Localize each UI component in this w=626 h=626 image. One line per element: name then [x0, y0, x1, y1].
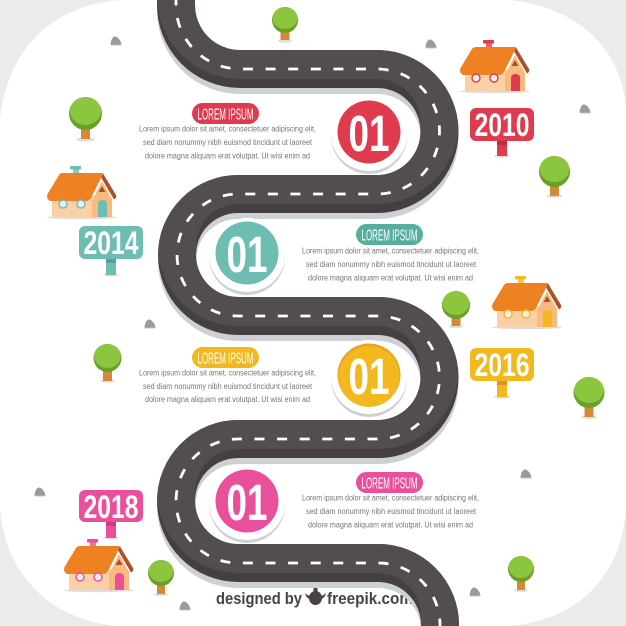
tree	[442, 291, 470, 328]
year sign 2016: 2016	[474, 347, 530, 383]
text block 1: red: LOREM IPSUM	[198, 106, 254, 124]
footer credit: designed by	[216, 589, 302, 608]
text block 4: pink: sed diam nonummy nibh euismod tincidunt ut laoreet	[306, 507, 477, 516]
winding road	[176, 0, 440, 626]
text block 4: pink	[302, 472, 479, 530]
text block 4: pink: LOREM IPSUM	[362, 476, 418, 492]
tree	[508, 556, 534, 592]
year sign 2018	[79, 489, 143, 540]
year sign 2014	[79, 225, 143, 277]
timeline badge 3: yellow	[331, 340, 407, 417]
timeline badge 1: red	[331, 97, 407, 174]
text block 3: yellow	[139, 347, 316, 404]
text block 1: red: Lorem ipsum dolor sit amet, consectetuer adipiscing elit,	[139, 124, 316, 134]
text block 2: teal: LOREM IPSUM	[362, 228, 418, 244]
house: red accents	[460, 40, 530, 93]
text block 3: yellow: sed diam nonummy nibh euismod tincidunt ut laoreet	[143, 382, 313, 391]
timeline badge 4: pink: 01	[226, 474, 268, 531]
tree	[539, 156, 570, 198]
text block 3: yellow: dolore magna aliquam erat volutpat. Ut wisi enim ad	[145, 395, 310, 404]
footer credit: freepik.com	[327, 589, 413, 608]
text block 4: pink: dolore magna aliquam erat volutpat. Ut wisi enim ad	[308, 520, 473, 530]
house: yellow accents	[492, 276, 562, 329]
tree	[94, 344, 122, 383]
text block 2: teal: sed diam nonummy nibh euismod tincidunt ut laoreet	[306, 260, 477, 269]
year sign 2018: 2018	[84, 489, 138, 525]
timeline badge 2: teal	[209, 218, 285, 295]
text block 3: yellow: LOREM IPSUM	[198, 350, 254, 368]
text block 1: red: dolore magna aliquam erat volutpat. Ut wisi enim ad	[145, 152, 310, 160]
tree	[272, 7, 298, 43]
footer credit	[216, 588, 413, 608]
timeline badge 2: teal: 01	[226, 226, 268, 283]
text block 1: red	[139, 103, 316, 160]
house: pink accents	[64, 539, 134, 592]
text block 2: teal	[302, 224, 479, 282]
text block 2: teal: Lorem ipsum dolor sit amet, consectetuer adipiscing elit,	[302, 246, 479, 256]
year sign 2010	[470, 107, 534, 158]
tree	[574, 377, 604, 419]
year sign 2014: 2014	[84, 225, 139, 261]
timeline badge 4: pink	[209, 466, 285, 543]
text block 2: teal: dolore magna aliquam erat volutpat. Ut wisi enim ad	[308, 274, 473, 282]
text block 4: pink: Lorem ipsum dolor sit amet, consectetuer adipiscing elit,	[302, 494, 479, 502]
house: teal accents	[47, 166, 117, 219]
text block 1: red: sed diam nonummy nibh euismod tincidunt ut laoreet	[143, 138, 313, 147]
text block 3: yellow: Lorem ipsum dolor sit amet, consectetuer adipiscing elit,	[139, 368, 316, 378]
tree	[69, 97, 102, 142]
timeline badge 1: red: 01	[348, 105, 390, 162]
timeline badge 3: yellow: 01	[348, 348, 390, 405]
tree	[148, 560, 174, 596]
year sign 2016	[470, 347, 534, 399]
year sign 2010: 2010	[474, 107, 530, 143]
